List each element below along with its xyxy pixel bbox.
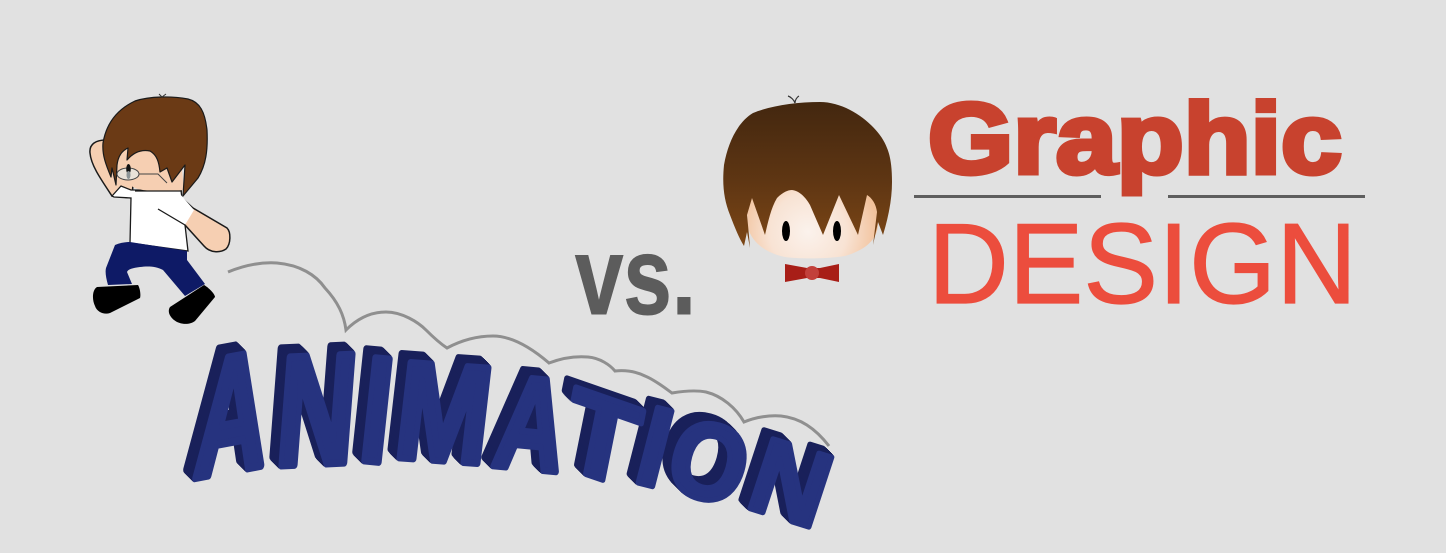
Graphic heading: Graphic <box>928 83 1342 195</box>
bow tie knot <box>805 266 819 280</box>
ANIMATION word: I <box>626 382 685 511</box>
bouncing motion trail <box>228 263 829 446</box>
ANIMATION word: N <box>271 321 363 500</box>
DESIGN heading: DESIGN <box>928 201 1357 328</box>
glasses <box>117 168 139 180</box>
right eye <box>833 221 841 241</box>
ANIMATION word <box>190 314 846 551</box>
divider left <box>914 195 1101 198</box>
ANIMATION word: O <box>656 393 762 530</box>
white sleeve and torso <box>112 186 188 251</box>
front arm <box>182 198 230 252</box>
cowlick <box>159 94 166 97</box>
vs. label: vs. <box>575 215 696 338</box>
ANIMATION word: M <box>388 331 500 494</box>
bow tie <box>785 264 839 282</box>
arm crease <box>158 209 185 225</box>
cowlick <box>788 96 799 103</box>
right shoe <box>169 285 215 324</box>
eye <box>126 164 131 174</box>
hair <box>103 97 207 196</box>
character: running animator <box>90 94 230 324</box>
face <box>113 150 184 191</box>
character: designer head <box>723 96 892 282</box>
pants <box>106 242 205 296</box>
ANIMATION word: I <box>353 326 400 495</box>
ANIMATION word: N <box>736 416 846 551</box>
face <box>745 185 878 258</box>
raised back arm <box>90 140 134 198</box>
hair <box>723 102 892 248</box>
left eye <box>782 221 790 241</box>
ANIMATION word: T <box>554 363 649 514</box>
ANIMATION word: A <box>486 349 578 501</box>
front sleeve <box>160 190 194 225</box>
divider right <box>1168 195 1365 198</box>
left shoe <box>93 285 140 314</box>
ANIMATION word: A <box>190 314 274 515</box>
